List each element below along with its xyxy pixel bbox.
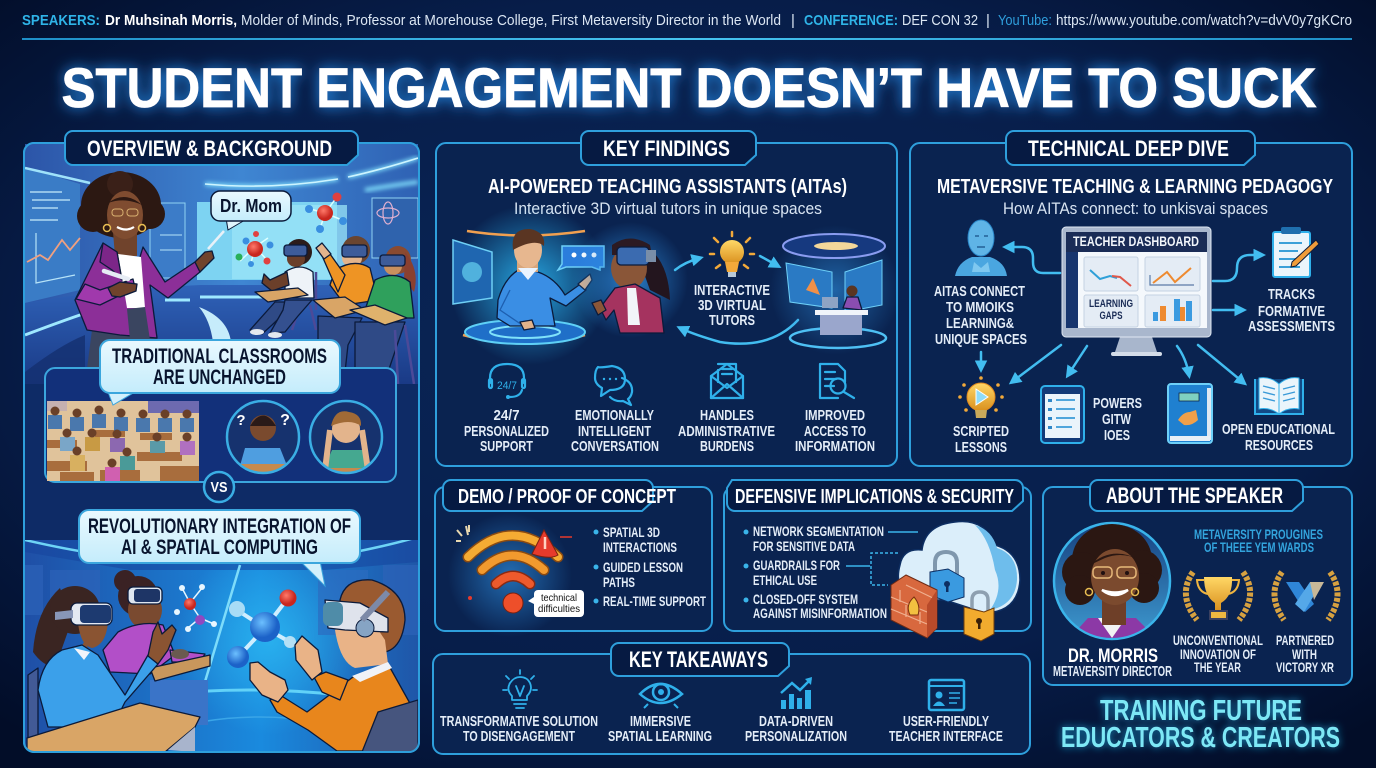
illustration: hologram tutor <box>450 205 610 365</box>
heading: demo: DEMO / PROOF OF CONCEPT <box>458 486 676 508</box>
feature: emotionally intelligent: EMOTIONALLY <box>575 407 654 424</box>
label: tracks formative assessments: FORMATIVE <box>1258 303 1325 320</box>
label: scripted lessons: SCRIPTED <box>953 423 1009 440</box>
heading: about the speaker: ABOUT THE SPEAKER <box>1106 483 1283 508</box>
takeaway: user-friendly interface <box>889 680 1003 745</box>
label: AITAs connect: AITAS CONNECT <box>934 283 1025 300</box>
callout: revolutionary integration: AI & SPATIAL COMPUTING <box>121 536 318 559</box>
girl in blue <box>27 586 200 752</box>
feature: 24/7 support: 24/7 <box>494 407 520 424</box>
teacher dashboard monitor: TEACHER DASHBOARD <box>1073 233 1199 249</box>
feature: access to information: ACCESS TO <box>804 423 866 440</box>
bullet list: GUARDRAILS FOR <box>753 557 840 573</box>
teacher dashboard monitor: GAPS <box>1100 310 1122 322</box>
label: partnered with Victory XR: WITH <box>1292 646 1317 662</box>
takeaway: transformative solution: TO DISENGAGEMENT <box>463 728 575 745</box>
icon: AI avatar <box>955 220 1007 276</box>
label: unconventional innovation <box>1173 632 1263 675</box>
callout: Dr. Mom: Dr. Mom <box>220 196 282 216</box>
label: tracks formative assessments <box>1248 286 1335 335</box>
VS badge <box>204 472 234 502</box>
bullet list: FOR SENSITIVE DATA <box>753 538 855 554</box>
teacher <box>75 171 224 384</box>
icon: scripted lessons bulb <box>958 376 1004 418</box>
molecules <box>236 192 347 267</box>
takeaway: transformative solution: TRANSFORMATIVE SOLUTION <box>440 713 598 730</box>
label: powers: POWERS <box>1093 395 1142 412</box>
arrows: cycle <box>675 256 798 344</box>
subtitle: AI-POWERED TEACHING ASSISTANTS (AITAs) <box>488 176 847 198</box>
callout: traditional classrooms: TRADITIONAL CLASSROOMS <box>112 345 327 368</box>
bullet list <box>744 523 887 621</box>
spatial computing scene <box>25 537 420 752</box>
label: powers: IOES <box>1104 427 1130 444</box>
feature: emotionally intelligent <box>571 366 659 455</box>
panel: overview and background <box>24 131 420 752</box>
feature: emotionally intelligent: INTELLIGENT <box>578 423 651 440</box>
callout: revolutionary integration: REVOLUTIONARY INTEGRATION OF <box>88 515 351 538</box>
girl in purple <box>103 570 205 674</box>
heading: about the speaker <box>1090 480 1303 511</box>
heading: key takeaways: KEY TAKEAWAYS <box>629 647 768 672</box>
feature: 24/7 support <box>464 364 549 455</box>
label: powers: GITW <box>1102 411 1132 428</box>
label: partnered with Victory XR: VICTORY XR <box>1276 659 1334 675</box>
label: open educational resources: OPEN EDUCATIONAL <box>1222 421 1335 438</box>
label: unconventional innovation: THE YEAR <box>1194 659 1241 675</box>
label: scripted lessons: LESSONS <box>955 439 1007 456</box>
callout: technical difficulties: difficulties <box>538 603 580 615</box>
VS badge: VS <box>210 479 228 496</box>
panel: demo / proof of concept <box>435 480 712 637</box>
takeaway: immersive spatial learning: SPATIAL LEARNING <box>608 728 712 745</box>
takeaway: immersive spatial learning: IMMERSIVE <box>630 713 691 730</box>
bullet list <box>594 524 706 609</box>
feature: access to information: IMPROVED <box>805 407 865 424</box>
bullet list: REAL-TIME SUPPORT <box>603 593 706 609</box>
label: AITAs connect: LEARNING& <box>946 315 1014 332</box>
speaker bar: https://www.youtube.com/watch?v=dvV0y7gKCro <box>1056 12 1352 29</box>
label: unconventional innovation: UNCONVENTIONAL <box>1173 632 1263 648</box>
speaker bar: | <box>791 12 795 29</box>
heading: overview <box>65 131 358 165</box>
label: interactive tutors: INTERACTIVE <box>694 282 770 299</box>
awards heading <box>1194 526 1323 555</box>
label: interactive tutors: TUTORS <box>709 312 755 329</box>
awards heading: OF THEEE YEM WARDS <box>1204 539 1314 555</box>
speaker bar: DEF CON 32 <box>902 12 978 29</box>
panel: technical deep dive <box>910 131 1352 466</box>
tagline <box>1061 695 1340 754</box>
feature: access to information: INFORMATION <box>795 438 875 455</box>
heading: key findings: KEY FINDINGS <box>603 136 730 161</box>
connector lines <box>846 532 918 566</box>
speaker bar: | <box>986 12 990 29</box>
feature: administrative burdens: BURDENS <box>700 438 754 455</box>
teacher dashboard monitor <box>1062 227 1211 356</box>
teacher dashboard monitor: LEARNING <box>1089 298 1133 310</box>
callout: traditional classrooms <box>100 307 340 405</box>
heading: defensive: DEFENSIVE IMPLICATIONS & SECURITY <box>735 486 1014 508</box>
label: tracks formative assessments: TRACKS <box>1268 286 1315 303</box>
takeaway: user-friendly interface: TEACHER INTERFACE <box>889 728 1003 745</box>
awards heading: METAVERSITY PROUGINES <box>1194 526 1323 542</box>
heading: overview: OVERVIEW & BACKGROUND <box>87 136 332 161</box>
icon: document list <box>1041 386 1084 443</box>
bullet list: GUIDED LESSON <box>603 559 683 575</box>
label: powers <box>1093 395 1142 444</box>
takeaway: immersive spatial learning <box>608 684 712 745</box>
feature: administrative burdens: ADMINISTRATIVE <box>678 423 775 440</box>
label: interactive tutors: 3D VIRTUAL <box>698 297 766 314</box>
callout: traditional classrooms: ARE UNCHANGED <box>153 366 286 389</box>
speaker bar: YouTube: <box>998 12 1052 29</box>
callout: Dr. Mom <box>211 191 291 230</box>
bullet list: AGAINST MISINFORMATION <box>753 605 887 621</box>
icon: textbook <box>1168 384 1212 443</box>
label: open educational resources: RESOURCES <box>1245 437 1313 454</box>
bullet list: SPATIAL 3D <box>603 524 660 540</box>
speaker bar: Dr Muhsinah Morris, <box>105 12 237 29</box>
takeaway: user-friendly interface: USER-FRIENDLY <box>903 713 989 730</box>
feature: administrative burdens <box>678 364 775 455</box>
label: partnered with Victory XR: PARTNERED <box>1276 632 1334 648</box>
label: interactive tutors <box>694 282 770 329</box>
feature: emotionally intelligent: CONVERSATION <box>571 438 659 455</box>
feature: 24/7 support: SUPPORT <box>480 438 533 455</box>
takeaway: data-driven personalization <box>745 677 847 745</box>
feature: 24/7 support: 24/7 <box>497 380 517 392</box>
label: partnered with Victory XR <box>1276 632 1334 675</box>
heading: technical deep dive: TECHNICAL DEEP DIVE <box>1028 136 1229 161</box>
heading: key takeaways <box>611 643 789 676</box>
takeaway: transformative solution <box>440 670 598 745</box>
illustration: failing wifi <box>448 513 572 637</box>
takeaway: data-driven personalization: DATA-DRIVEN <box>759 713 833 730</box>
small molecule <box>174 584 217 632</box>
illustration: virtual classroom pod <box>770 225 900 355</box>
callout: revolutionary integration <box>79 510 360 586</box>
traditional classroom box: ? <box>236 412 246 429</box>
bullet list: PATHS <box>603 574 635 590</box>
description: Interactive 3D virtual tutors in unique spaces <box>514 199 822 218</box>
label: tracks formative assessments: ASSESSMENTS <box>1248 318 1335 335</box>
callout: technical difficulties <box>528 590 584 617</box>
illustration: woman in VR headset <box>572 222 688 338</box>
tagline: TRAINING FUTURE <box>1100 695 1302 727</box>
description: How AITAs connect: to unkisvai spaces <box>1003 199 1268 218</box>
heading: key findings <box>581 131 756 165</box>
heading: defensive <box>727 480 1023 511</box>
panel: defensive implications <box>724 480 1031 641</box>
feature: administrative burdens: HANDLES <box>700 407 754 424</box>
speaker bar: SPEAKERS: <box>22 12 100 29</box>
bullet list: CLOSED-OFF SYSTEM <box>753 591 858 607</box>
heading: demo <box>443 480 676 511</box>
label: AITAs connect: UNIQUE SPACES <box>935 331 1027 348</box>
panel: key findings <box>436 131 900 466</box>
students in VR <box>250 236 416 384</box>
desk behind <box>150 680 208 725</box>
molecule <box>227 590 296 668</box>
callout: technical difficulties: technical <box>541 592 577 604</box>
icon: lightbulb <box>710 232 754 277</box>
icon: chat bubble <box>558 246 604 270</box>
feature: access to information <box>795 364 875 455</box>
bullet list: ETHICAL USE <box>753 572 817 588</box>
bullet list: INTERACTIONS <box>603 539 677 555</box>
speaker bar: CONFERENCE: <box>804 12 898 29</box>
label: scripted lessons <box>953 423 1009 456</box>
takeaway: data-driven personalization: PERSONALIZATION <box>745 728 847 745</box>
classroom scene <box>25 144 418 384</box>
speaker name: DR. MORRIS <box>1068 646 1158 667</box>
label: open educational resources <box>1222 421 1335 454</box>
award: partner logo <box>1274 572 1338 620</box>
award: trophy <box>1186 572 1250 620</box>
label: AITAs connect <box>934 283 1027 348</box>
speaker bar <box>22 12 1352 29</box>
speaker bar: Molder of Minds, Professor at Morehouse College, First Metaversity Director in the World <box>241 12 781 29</box>
arrows: dashboard connections <box>981 247 1262 383</box>
label: unconventional innovation: INNOVATION OF <box>1180 646 1256 662</box>
speaker role: METAVERSITY DIRECTOR <box>1053 663 1172 680</box>
panel: about the speaker <box>1043 480 1352 685</box>
portrait: Dr. Morris <box>1054 523 1170 640</box>
traditional classroom box: ? <box>280 412 290 429</box>
icon: clipboard <box>1273 227 1319 277</box>
illustration: cloud and locks <box>891 521 1020 641</box>
feature: 24/7 support: PERSONALIZED <box>464 423 549 440</box>
bullet list: NETWORK SEGMENTATION <box>753 523 884 539</box>
traditional classroom box <box>45 368 396 482</box>
panel: key takeaways <box>433 643 1030 754</box>
man in orange <box>250 580 420 752</box>
heading: technical deep dive <box>1006 131 1255 165</box>
label: AITAs connect: TO MMOIKS <box>946 299 1014 316</box>
icon: open book <box>1255 378 1303 414</box>
